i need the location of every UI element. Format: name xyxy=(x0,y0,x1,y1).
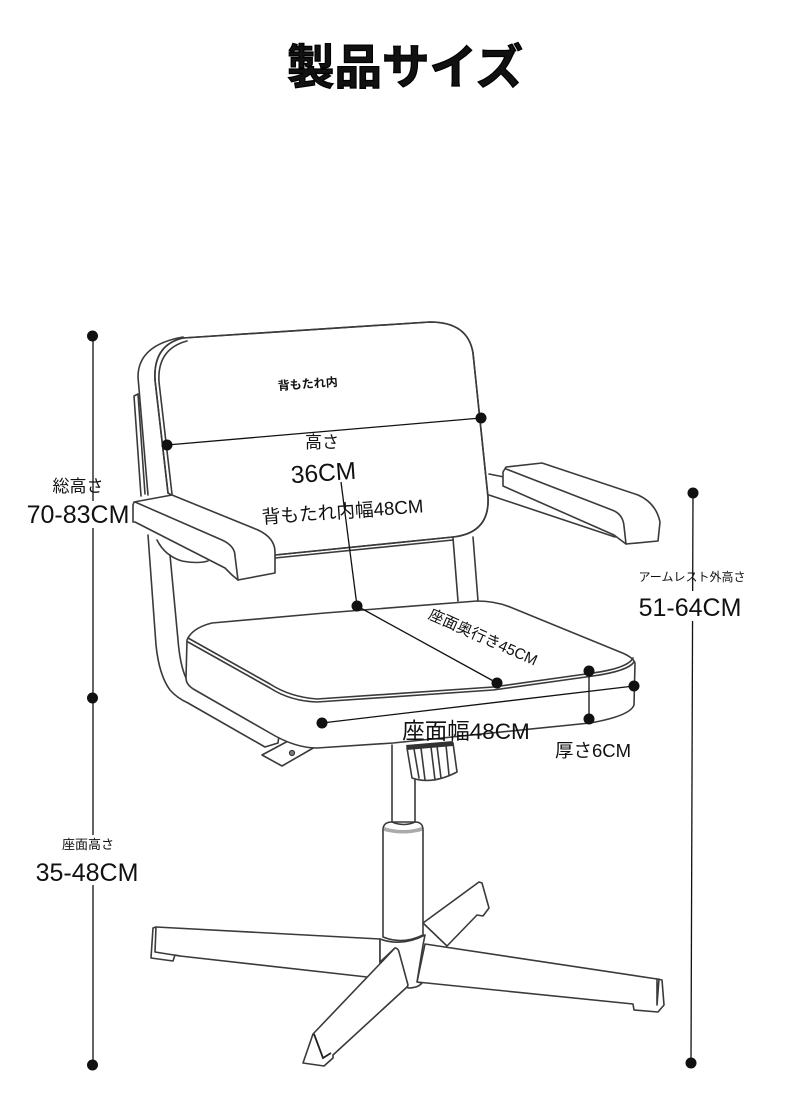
right armrest xyxy=(489,463,660,544)
dimension: seat depth: 座面奥行き45CM xyxy=(426,606,540,670)
chair illustration xyxy=(133,322,664,1066)
dimension: seat thickness: 厚さ6CM xyxy=(555,740,631,761)
dimension: seat thickness xyxy=(555,666,631,761)
dimension: seat height xyxy=(34,835,138,887)
back leg xyxy=(423,882,489,946)
dimension: total height: 総高さ xyxy=(52,477,104,496)
chair frame xyxy=(134,337,478,747)
left armrest xyxy=(133,495,275,580)
dimension: armrest height: アームレスト外高さ xyxy=(639,570,745,584)
dimension: armrest height xyxy=(636,488,745,1068)
pole and knob xyxy=(392,741,457,822)
dimension: seat height: 35-48CM xyxy=(36,859,138,887)
dimension: seat height: 座面高さ xyxy=(62,837,114,852)
dimension: armrest height: 51-64CM xyxy=(639,594,741,622)
dimension: backrest inner width and height: 背もたれ内 xyxy=(277,374,338,393)
dimension: seat width xyxy=(316,680,640,744)
dimension: total height: 70-83CM xyxy=(27,501,129,529)
dimension: seat width: 座面幅48CM xyxy=(402,719,530,744)
seat xyxy=(186,601,635,766)
title: 製品サイズ xyxy=(287,42,523,95)
left leg xyxy=(151,927,380,979)
dimension: seat depth xyxy=(357,606,540,688)
dimension: backrest inner width and height: 背もたれ内幅48CM xyxy=(261,495,424,528)
front leg xyxy=(303,948,408,1066)
hub xyxy=(380,935,425,988)
dimension: total height xyxy=(27,330,129,1070)
front leg tip ridge xyxy=(314,1034,331,1058)
right leg xyxy=(417,944,664,1012)
gas cylinder xyxy=(383,822,423,941)
backrest xyxy=(155,322,488,558)
dimension: backrest inner width and height xyxy=(162,374,486,612)
dimension: backrest inner width and height: 36CM xyxy=(290,458,357,489)
dimension: backrest inner width and height: 高さ xyxy=(305,433,339,452)
